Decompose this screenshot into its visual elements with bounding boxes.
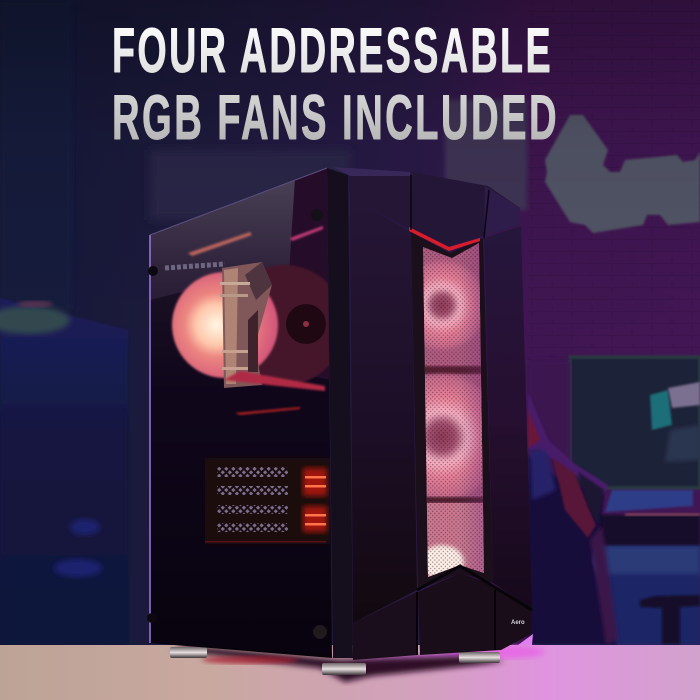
lower chevron — [418, 573, 532, 655]
top of case — [333, 167, 410, 176]
mid motherboard glow — [235, 407, 300, 415]
case corner — [327, 168, 353, 658]
wall light panels — [545, 115, 700, 233]
desk — [595, 515, 700, 545]
rear fan — [172, 272, 278, 378]
keyboard — [605, 490, 693, 512]
left monitor — [0, 298, 128, 645]
lower board — [205, 458, 330, 544]
red accent line — [409, 227, 480, 251]
lit pillar — [445, 100, 527, 210]
back shelf — [150, 150, 350, 220]
glass light edge — [149, 235, 151, 643]
foot front — [322, 663, 366, 675]
stool — [640, 595, 700, 644]
right front side panel — [484, 226, 532, 610]
vertical seams — [411, 175, 489, 238]
front bottom panel left — [353, 592, 418, 660]
right fan — [258, 264, 329, 382]
table underglow — [445, 645, 545, 659]
thumbscrew bottom left — [147, 613, 157, 623]
red LEDs — [303, 468, 327, 496]
front side panel — [348, 172, 411, 230]
title — [112, 16, 559, 153]
mesh panel surround — [411, 232, 493, 590]
thumbscrew left — [148, 266, 158, 276]
wire strip — [165, 264, 225, 268]
cooler heatsink — [220, 262, 325, 391]
graphics slots — [217, 467, 288, 532]
PC case — [147, 167, 532, 675]
top front panel — [410, 172, 520, 247]
mesh fans — [423, 243, 484, 577]
glass interior — [150, 168, 331, 544]
foot back left — [170, 647, 207, 658]
side glass panel — [147, 168, 345, 660]
top glow bars — [188, 232, 252, 256]
foot right — [459, 652, 500, 663]
curtain at left — [0, 0, 72, 310]
thumbscrew bottom right — [313, 625, 327, 639]
right lower wall — [528, 360, 570, 490]
feet — [170, 647, 500, 675]
brick wall — [528, 0, 700, 360]
thumbscrew top right — [311, 209, 323, 221]
right monitor — [570, 357, 700, 488]
table — [0, 634, 700, 700]
logo: Aero — [511, 620, 525, 626]
gaming chair — [528, 392, 618, 645]
case shadow — [170, 646, 505, 682]
